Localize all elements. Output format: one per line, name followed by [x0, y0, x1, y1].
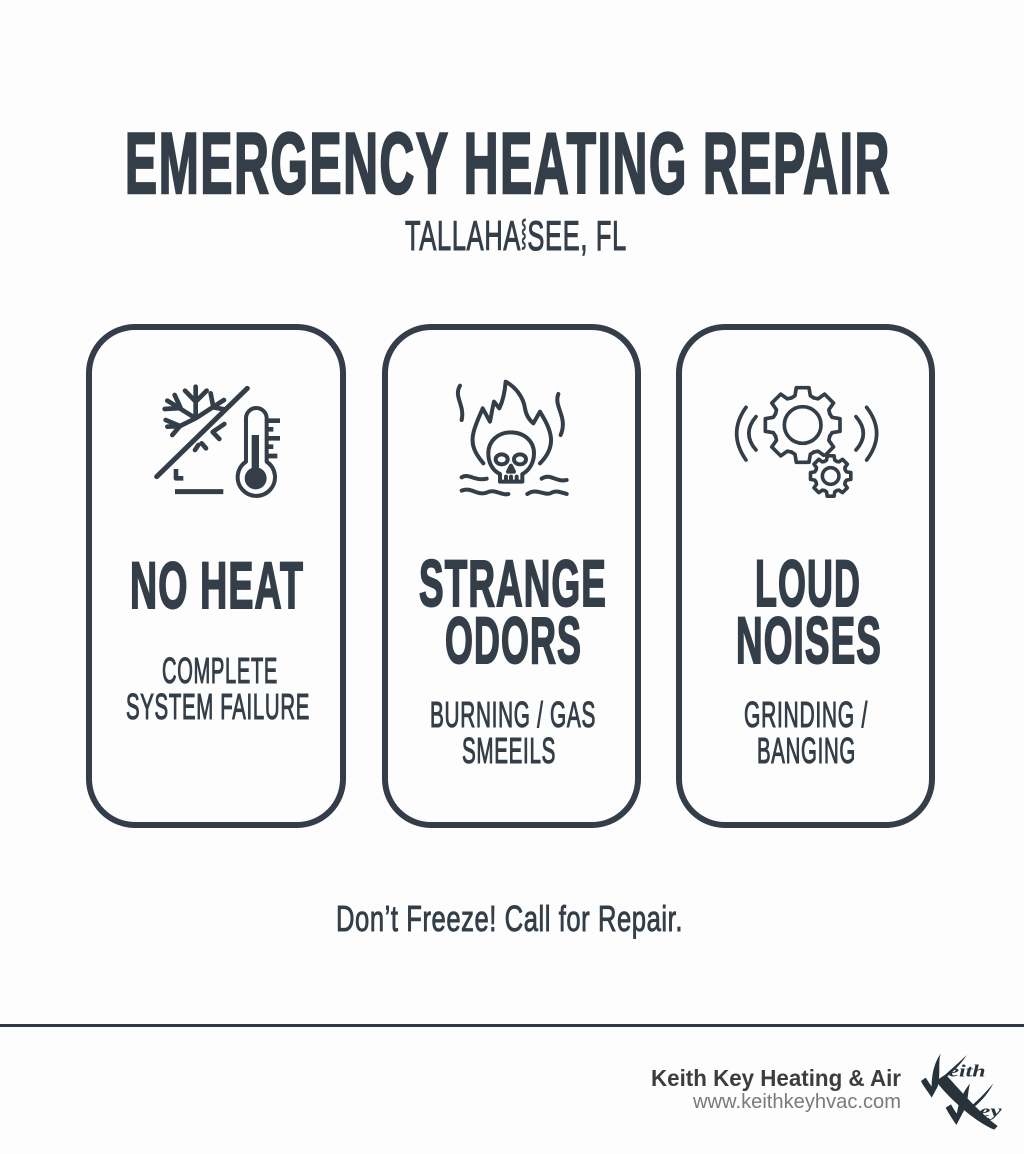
- logo: Keith Key: eith: [948, 1062, 986, 1081]
- panel: no heat: [89, 327, 343, 825]
- call to action: Don’t Freeze! Call for Repair.: [336, 898, 683, 939]
- text: burning / gas smells: SMEEILS: [462, 730, 556, 771]
- company name: Keith Key Heating & Air: [651, 1065, 901, 1091]
- footer divider: [0, 1024, 1024, 1027]
- heading: no heat: NO HEAT: [130, 548, 304, 622]
- icon: flame and skull: [458, 382, 567, 494]
- panel: loud noises: [679, 327, 932, 825]
- text: grinding / banging: GRINDING /: [744, 694, 868, 735]
- heading: loud noises: NOISES: [736, 603, 882, 677]
- heading: loud noises: LOUD: [755, 546, 861, 620]
- icon: snowflake, slash and thermometer: [157, 387, 280, 496]
- panel: strange odors: [385, 327, 638, 825]
- subtitle: ⸾: [521, 217, 527, 250]
- heading: strange odors: [419, 546, 607, 677]
- heading: loud noises: [736, 546, 882, 677]
- icon: gears and sound waves: [737, 388, 877, 496]
- heading: strange odors: ODORS: [445, 603, 582, 677]
- text: complete system failure: SYSTEM FAILURE: [126, 686, 310, 727]
- heading: strange odors: STRANGE: [419, 546, 607, 620]
- logo: Keith Key: ey: [979, 1102, 1002, 1121]
- logo: Keith Key: [921, 1053, 1002, 1130]
- text: burning / gas smells: [430, 694, 596, 771]
- text: grinding / banging: BANGING: [757, 730, 856, 771]
- subtitle: TALLAHA: [405, 212, 597, 259]
- text: complete system failure: COMPLETE: [162, 650, 278, 691]
- text: burning / gas smells: BURNING / GAS: [430, 694, 596, 735]
- text: grinding / banging: [744, 694, 868, 771]
- company website: www.keithkeyhvac.com: [692, 1091, 901, 1113]
- subtitle: SEE, FL: [527, 212, 627, 259]
- text: complete system failure: [126, 650, 310, 727]
